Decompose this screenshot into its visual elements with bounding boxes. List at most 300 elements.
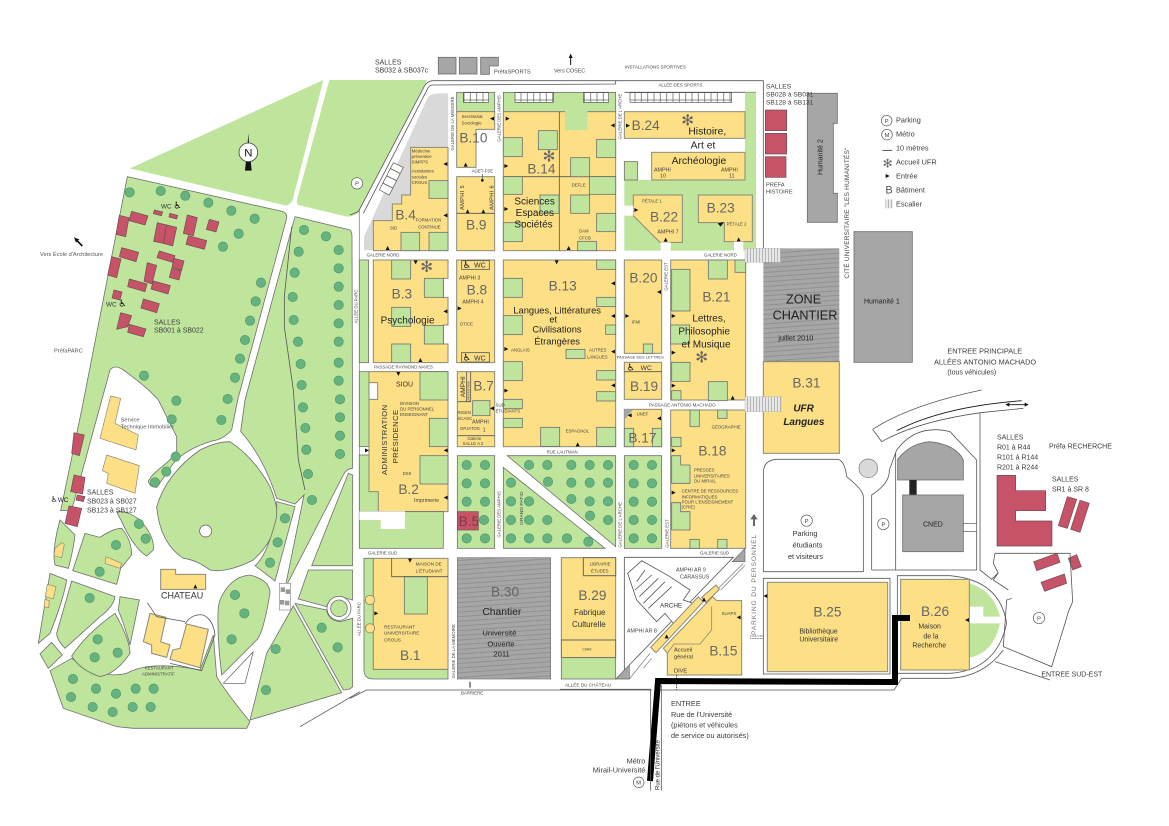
parking etudiants: P — [805, 519, 809, 525]
legend: metro — [882, 129, 915, 140]
arrow: vers COSEC: Vers COSEC — [554, 68, 585, 74]
legend: accueil UFR: ✻ — [883, 156, 893, 170]
legend: escalier: Escalier — [896, 200, 923, 209]
gate near park — [279, 583, 291, 610]
building: B.24 Histoire Art et Archeologie: AMPHI — [721, 168, 738, 174]
building: B.3 Psychologie: Psychologie — [381, 315, 435, 326]
building: B.19: WC — [641, 365, 652, 372]
label: entree principale: ENTREE PRINCIPALE — [947, 347, 1022, 356]
building: B.1 Restaurant universitaire: B.1 — [400, 648, 420, 663]
gallery labels south: GALERIE DE LA MÉMOIRE — [451, 624, 456, 678]
building: B.23 — [698, 195, 752, 251]
building: B.3 Psychologie — [373, 258, 448, 363]
amphitheatre arche: CARASSUS — [680, 574, 710, 580]
building: B.4: sociales — [412, 175, 427, 180]
prefab classrooms SB001 to SB022 — [108, 210, 219, 337]
zone chantier: juillet 2010 — [777, 334, 813, 343]
gallery labels south: GALERIE SUD — [368, 551, 397, 556]
building: B.18 — [671, 410, 746, 548]
building: B.8: AMPHI 3 — [459, 276, 480, 282]
building: B.22 — [624, 195, 682, 251]
building: chateau: CHATEAU — [161, 591, 203, 601]
building: B.24 Histoire Art et Archeologie: Archéologie — [672, 156, 726, 167]
CNED site: P — [881, 522, 885, 528]
legend: metro: M — [885, 133, 890, 139]
building: B.30 Chantier: 2011 — [493, 650, 510, 659]
label: Prefa PARC: PréfaPARC — [54, 349, 83, 355]
arrow: vers COSEC — [554, 54, 585, 74]
building: B.9: AMPHI 5 — [460, 185, 466, 210]
building: B.1 Restaurant universitaire: MAISON DE — [416, 562, 442, 567]
label: WC with wheelchair: ♿WC — [51, 495, 69, 504]
building: B.7 — [457, 372, 495, 447]
building: B.29 Fabrique Culturelle: Culturelle — [572, 620, 606, 629]
prefab histoire: PRÉFA — [766, 183, 785, 189]
grand patio upper triangle — [507, 456, 616, 547]
building: B.24 Histoire Art et Archeologie — [624, 92, 756, 251]
park: northern landscape — [38, 80, 427, 728]
building: B.31 UFR Langues: UFR — [793, 404, 815, 415]
building: B.1 Restaurant universitaire: L'ÉTUDIANT — [416, 568, 443, 574]
south east: parking, CNED, bibliotheque, recherche — [657, 390, 1112, 690]
building: B.18: B.18 — [698, 443, 726, 458]
building: B.15: SUAPS — [722, 611, 736, 616]
building: B.15: DIVE — [674, 669, 687, 675]
legend: accueil UFR: Accueil UFR — [896, 157, 937, 166]
parking etudiants: Parking — [793, 529, 818, 538]
label: entree: Rue de l'Université — [671, 710, 732, 719]
building: Humanite 2: Humanité 2 — [818, 139, 825, 175]
label: rue de l'universite vertical: Rue de l'Université — [656, 739, 662, 790]
vertical gallery labels: PASSAGE DES LETTRES — [617, 355, 664, 360]
building: B.30 Chantier: Université — [482, 628, 516, 637]
building: B.1 Restaurant universitaire — [364, 558, 448, 679]
building: B.2 Administration Presidence: Imprimerie — [414, 498, 439, 504]
building: B.4: FORMATION — [416, 218, 441, 223]
building: B.7: Galerie — [467, 436, 482, 441]
lawn: east of the park road — [241, 217, 353, 588]
building: B.9 — [457, 169, 495, 251]
building: B.14 Sciences Espaces Societes: ✻ — [543, 148, 555, 166]
north arrow: N — [244, 147, 252, 159]
building: B.9: AMPHI 6 — [489, 185, 495, 210]
entrance rue de l'Universite — [560, 685, 749, 791]
label: Vers Ecole d'Architecture: Vers École d'Architecture — [40, 251, 103, 258]
label: prefa recherche: Préfa RECHERCHE — [1049, 443, 1112, 450]
building: B.8: DTICE — [460, 322, 473, 327]
building: B.17: B.17 — [628, 430, 656, 445]
vertical gallery labels: GALERIE NORD — [704, 253, 737, 258]
building: B.4: préventive — [412, 154, 432, 159]
WC icon south: WC ♿ — [106, 298, 127, 309]
building: B.21 Lettres Philosophie Musique: Philosophie — [678, 326, 730, 337]
building: B.2 Administration Presidence: PRÉSIDENCE — [391, 410, 400, 463]
building: B.4: CROUS — [412, 180, 427, 185]
labels: allee du chateau and barriere: ALLÉE DU CHÂTEAU — [565, 682, 611, 688]
legend: accueil UFR — [883, 156, 937, 170]
top road outline — [350, 81, 763, 250]
building: B.13 Langues Litteratures: AUTRES — [589, 348, 607, 353]
lawn: north-east — [297, 80, 427, 217]
building: B.26 Maison de la Recherche: Maison — [918, 624, 941, 631]
grand patio trees — [506, 460, 613, 546]
road lines near park east — [300, 692, 360, 727]
building: B.22: PÉTALE 1 — [642, 199, 662, 204]
CNED site: CNED — [923, 522, 943, 529]
building: B.4: B.4 — [395, 207, 416, 222]
label: entree: ENTREE — [671, 699, 701, 708]
thin path across lawn — [284, 227, 305, 490]
label: salles R01: R101 à R144 — [997, 455, 1038, 462]
building: B.2 Administration Presidence — [359, 372, 448, 512]
building: B.14 Sciences Espaces Societes: CFCB — [579, 236, 591, 241]
building: B.13 Langues Litteratures: et — [549, 315, 558, 325]
parking etudiants: et visiteurs — [788, 552, 823, 561]
building: B.18: UNIVERSITAIRES — [694, 474, 730, 479]
building: B.24 Histoire Art et Archeologie: Histoire, — [688, 127, 726, 138]
label: allee des sports: ALLÉE DES SPORTS — [658, 82, 702, 88]
label: cite universitaire: CITÉ UNIVERSITAIRE "LES HUMANITÉS" — [842, 147, 851, 279]
label: entree: de service ou autorisés) — [671, 731, 749, 740]
building: B.24 Histoire Art et Archeologie: AMPHI — [654, 168, 671, 174]
building: B.8: WC — [474, 356, 486, 363]
campus north blocks — [350, 54, 763, 447]
building: B.30 Chantier: Ouverte — [487, 639, 515, 648]
building: B.18: (CRIE) — [682, 505, 695, 510]
label: salles R01: R01 à R44 — [997, 445, 1031, 452]
building: B.18: GÉOGRAPHIE — [712, 424, 741, 429]
building: B.30 Chantier: Chantier — [482, 607, 522, 618]
building: B.4: SIMPPS — [412, 160, 428, 165]
building: B.24 Histoire Art et Archeologie: B.24 — [632, 118, 660, 133]
building: B.24 Histoire Art et Archeologie: 10 — [660, 174, 666, 180]
arrow: towards Ecole d'Architecture — [76, 239, 82, 246]
building: B.1 Restaurant universitaire: CROUS — [384, 638, 401, 643]
building: B.7: AMPHI — [472, 420, 489, 426]
grand patio lower triangle — [503, 467, 605, 548]
building: B.24 Histoire Art et Archeologie: 11 — [729, 174, 735, 180]
prefab classrooms SB023 to SB127 — [65, 433, 85, 527]
building: B.18: PRESSES — [694, 468, 715, 473]
building: B.21 Lettres Philosophie Musique: B.21 — [702, 290, 730, 305]
label: SUD etudiants: ÉTUDIANTS — [496, 409, 520, 414]
building: B.26 Maison de la Recherche: de la — [923, 634, 939, 641]
label: Prefa Sports: PréfaSPORTS — [494, 70, 531, 76]
label: rue Lautman: RUE LAUTMAN — [547, 450, 578, 455]
label: entree principale: (tous véhicules) — [947, 369, 996, 376]
building: B.10: B.10 — [459, 131, 488, 146]
gallery labels south: GALERIE DES AMPHIS — [497, 491, 502, 538]
building: Humanite 1 — [854, 232, 912, 362]
label: SALLES SB001: SB001 à SB022 — [154, 328, 204, 335]
label: salles R01: SALLES — [997, 434, 1023, 441]
building: B.21 Lettres Philosophie Musique: ✻ — [695, 349, 708, 367]
building: B.2 Administration Presidence: ADMINISTRATION — [380, 404, 389, 475]
label: salles SB028: SB128 à SB131 — [766, 100, 814, 107]
zone chantier: ZONE — [786, 292, 821, 306]
prefab grey buildings — [438, 57, 498, 74]
building: B.22: B.22 — [650, 210, 678, 225]
legend: metro: Métro — [896, 130, 915, 139]
legend: batiment: Bâtiment — [896, 186, 925, 195]
building: Humanite 1: Humanité 1 — [864, 298, 900, 305]
building: B.4 — [373, 147, 448, 251]
building: B.29 Fabrique Culturelle: B.29 — [578, 588, 606, 603]
building: B.25 Bibliotheque — [763, 578, 890, 674]
east side: Humanites, chantier, legend — [745, 84, 1036, 453]
label: metro: Métro — [627, 756, 645, 765]
building: B.31 UFR Langues: B.31 — [792, 376, 820, 391]
building: B.26 Maison de la Recherche: Recherche — [912, 643, 946, 650]
label: salles SR: SR1 à SR 8 — [1052, 486, 1089, 493]
building: B.2 Administration Presidence: DU PERSONNEL — [400, 407, 435, 412]
entrance road — [873, 390, 1029, 442]
WC icon north: WC ♿ — [161, 200, 182, 211]
lawn: north wedge — [130, 80, 323, 205]
label: salles SB032: SALLES — [375, 59, 401, 66]
building: B.9: B.9 — [466, 217, 486, 232]
building: B.13 Langues Litteratures: Civilisations — [532, 325, 582, 335]
buildings of the park — [44, 396, 139, 608]
north arrow — [239, 133, 258, 171]
building: B.4: Médecine — [412, 149, 431, 154]
prefab histoire: HISTOIRE — [766, 189, 793, 195]
labels: allee du chateau and barriere: BARRIERE — [461, 691, 483, 696]
arrow head — [74, 237, 79, 243]
building: B.7: B.7 — [473, 379, 494, 394]
zone chantier: CHANTIER — [773, 308, 837, 322]
building: B.18: POUR L'ENSEIGNEMENT — [682, 500, 734, 505]
vertical gallery labels: GALERIE NORD — [367, 253, 399, 258]
vertical gallery labels: PASSAGE RAYMOND NAVES — [374, 365, 433, 370]
garden block west with B.5: B.5 — [459, 514, 480, 529]
stairs south — [745, 397, 781, 412]
building: B.29 Fabrique Culturelle — [561, 558, 616, 679]
building: B.29 Fabrique Culturelle: CIAM — [582, 648, 591, 652]
building: B.30 Chantier: B.30 — [491, 585, 519, 600]
parking etudiants: étudiants — [793, 541, 823, 550]
pond — [200, 525, 212, 537]
vertical gallery labels: ALLÉE DU PARC — [354, 289, 359, 323]
label: Service Technique Immobilier: Service — [121, 418, 140, 424]
lawn: small patches around park — [38, 473, 353, 728]
amphitheatre arche — [627, 561, 710, 635]
gallery labels south — [357, 491, 729, 678]
label: SALLES SB023: SB123 à SB127 — [87, 507, 137, 514]
building: B.15: Accueil — [674, 648, 692, 654]
prefab research buildings — [997, 475, 1089, 591]
building: B.14 Sciences Espaces Societes: Espaces — [516, 208, 554, 219]
garden block west with B.5 — [457, 456, 495, 548]
building: B.15: général — [674, 655, 693, 661]
building: B.29 Fabrique Culturelle: Fabrique — [574, 608, 606, 617]
label: salles SB028: SALLES — [766, 84, 791, 91]
gallery labels south: GALERIE SUD — [700, 551, 729, 556]
vertical gallery labels: GALERIE DE L'ARCHE — [618, 94, 623, 139]
building: B.1 Restaurant universitaire: RESTAURANT — [384, 625, 415, 630]
label: parking du personnel — [750, 514, 763, 638]
building: B.22: AMPHI 7 — [657, 229, 679, 235]
building: B.29 Fabrique Culturelle: LIBRAIRIE — [590, 561, 611, 566]
parking south-east: ENTREE SUD-EST — [1041, 671, 1103, 678]
parking south-east — [993, 553, 1103, 680]
building: B.7: SCASC — [457, 416, 472, 421]
legend — [881, 115, 937, 209]
building: B.13 Langues Litteratures — [503, 260, 616, 447]
building: B.13 Langues Litteratures: LANGUES — [587, 355, 608, 360]
building: B.18: INFORMATIQUES — [682, 494, 718, 499]
amphitheatre arche: AMPHI AR 9 — [676, 567, 706, 573]
building: B.25 Bibliotheque: B.25 — [813, 605, 842, 620]
legend: parking — [881, 115, 921, 126]
building: B.26 Maison de la Recherche: B.26 — [921, 604, 949, 619]
building: B.7: 1 — [483, 428, 486, 434]
amphitheatre arche: AMPHI AR 8 — [627, 629, 657, 635]
building: restaurant administratif: RESTAURANT — [145, 666, 174, 671]
building: B.4: SID — [390, 226, 397, 231]
building: B.7: OPJATOS — [460, 426, 480, 431]
building: B.13 Langues Litteratures: Langues, Littératures — [513, 306, 601, 316]
label: salles SB032: SB032 à SB037c — [375, 68, 429, 75]
label: installations sportives: INSTALLATIONS SPORTIVES — [625, 65, 686, 70]
gallery labels south: ALLÉE DU PARC — [357, 602, 362, 636]
building: B.18: DU MIRAIL — [694, 479, 716, 484]
building: B.29 Fabrique Culturelle: ÉTUDES — [591, 569, 609, 574]
building: B.13 Langues Litteratures: ESPAGNOL — [566, 429, 590, 434]
building: B.4: Assistantes — [412, 169, 434, 174]
building: B.23: PÉTALE 2 — [727, 222, 747, 227]
building: B.14 Sciences Espaces Societes: DAM — [579, 229, 589, 234]
main route: black pedestrian path — [650, 618, 910, 781]
building: B.19: ♿ — [627, 362, 635, 373]
legend: parking: Parking — [896, 116, 921, 125]
south road line — [657, 650, 1003, 690]
building: B.17: UNEF — [637, 411, 649, 416]
building: B.7: INGEN — [457, 410, 471, 415]
building: B.18: CENTRE DE RESSOURCES — [682, 489, 738, 494]
legend: batiment — [885, 184, 925, 196]
building: B.9: AGET-FSE — [472, 169, 493, 174]
vertical gallery labels: GALERIE DE LA MÉMOIRE — [450, 96, 455, 151]
building: B.1 Restaurant universitaire: UNIVERSITAIRE — [384, 631, 419, 636]
label: SALLES SB023: SALLES — [87, 490, 113, 497]
parking etudiants — [763, 459, 863, 572]
label: passage Antonio Machado: PASSAGE ANTONIO MACHADO — [649, 403, 716, 408]
building: B.31 UFR Langues — [763, 362, 839, 453]
building: B.8 — [457, 260, 495, 364]
amphitheatre arche: ARCHE — [660, 602, 682, 609]
label: SALLES SB001: SALLES — [154, 319, 180, 326]
building: B.17 — [624, 409, 662, 447]
label: salles SR: SALLES — [1052, 476, 1078, 483]
building: B.24 Histoire Art et Archeologie: ✻ — [681, 111, 694, 129]
label: salles SB028: SB028 à SB031 — [766, 92, 814, 99]
label: entree principale: ALLÉES ANTONIO MACHADO — [934, 358, 1036, 367]
building: B.8: WC — [474, 262, 486, 269]
gallery labels south: GALERIE DE L'ARCHE — [618, 502, 623, 548]
building: B.13 Langues Litteratures: Étrangères — [534, 336, 580, 346]
lawn: central oval — [157, 442, 277, 571]
legend: entree: Entrée — [896, 172, 918, 181]
campus south blocks — [350, 362, 746, 698]
allee du parc edge line — [358, 210, 361, 548]
building: B.13 Langues Litteratures: B.13 — [549, 279, 577, 294]
parking marker on lawn — [351, 178, 363, 189]
building: B.23: B.23 — [707, 201, 735, 216]
arche triangle frame — [616, 548, 745, 679]
parking bays — [379, 163, 403, 195]
label: salles R01: R201 à R244 — [997, 465, 1038, 472]
legend: scale: 10 mètres — [896, 144, 929, 153]
building: B.14 Sciences Espaces Societes: DEFLE — [572, 183, 586, 188]
building: restaurant administratif — [142, 603, 215, 677]
building: B.14 Sciences Espaces Societes: Sociétés — [514, 220, 553, 231]
building: B.21 Lettres Philosophie Musique — [671, 260, 746, 401]
building: B.31 UFR Langues: Langues — [783, 417, 825, 428]
building: B.8: ♿ — [463, 260, 471, 271]
zone chantier — [763, 248, 839, 362]
building: B.19: B.19 — [630, 379, 658, 394]
building: B.14 Sciences Espaces Societes: Sciences — [514, 197, 555, 208]
building: B.8: AMPHI 4 — [462, 300, 484, 306]
building: B.25 Bibliotheque: Bibliothèque — [799, 629, 838, 636]
building: B.2 Administration Presidence: DSII — [403, 471, 411, 476]
building: restaurant administratif: ADMINISTRATIF — [142, 672, 175, 677]
labels: allee du chateau and barriere — [350, 675, 677, 698]
road outlines — [560, 685, 661, 791]
building: B.20: IFMI — [632, 320, 640, 325]
building: chateau — [161, 569, 206, 601]
building: B.25 Bibliotheque: Universitaire — [799, 637, 838, 644]
building: B.3 Psychologie: B.3 — [392, 287, 412, 302]
building: B.4: CONTINUE — [418, 225, 441, 230]
label: metro: Mirail-Université — [593, 765, 645, 774]
label: SALLES SB023: SB023 à SB027 — [87, 499, 137, 506]
lawn south of administration — [359, 511, 443, 548]
roundabout — [859, 459, 878, 478]
building: B.10 — [457, 92, 495, 167]
building: B.2 Administration Presidence: SIOU — [396, 381, 413, 388]
building: B.20 — [624, 260, 662, 353]
grey car park — [364, 93, 448, 250]
building: B.2 Administration Presidence: ENSEIGNANT — [400, 412, 428, 417]
building: B.21 Lettres Philosophie Musique: et Musique — [682, 339, 731, 350]
building: B.15: B.15 — [709, 644, 738, 659]
legend: parking: P — [885, 119, 889, 125]
building: B.3 Psychologie: ✻ — [420, 258, 433, 276]
building: B.14 Sciences Espaces Societes: B.14 — [527, 161, 556, 176]
label: Grand Patio: GRAND PATIO — [519, 491, 525, 525]
building: B.10: Sociologie — [462, 121, 482, 126]
label: entree: (piétons et véhicules — [671, 720, 738, 729]
label: parking du personnel: PARKING DU PERSONNEL — [751, 534, 758, 635]
building: B.8: ♿ — [463, 353, 471, 364]
building: B.7: AMPHI — [460, 376, 467, 397]
building: B.7: UNIVERSITAIRE — [467, 381, 471, 401]
building: B.13 Langues Litteratures: ANGLAIS — [511, 348, 530, 353]
building: B.2 Administration Presidence: B.2 — [398, 482, 419, 497]
label: SUD etudiants: SUD — [496, 403, 505, 408]
parking marker on lawn: P — [355, 182, 359, 188]
parking south-east: P — [1037, 616, 1041, 622]
north arrow and park labels — [40, 133, 363, 355]
building: B.20: B.20 — [629, 271, 658, 286]
building: B.19 — [624, 362, 662, 399]
vertical gallery labels: GALERIE EST — [664, 262, 669, 291]
green strip along allee du parc — [359, 260, 369, 363]
building: B.10: Secrétariat — [462, 114, 483, 119]
building: B.2 Administration Presidence: DIVISION — [400, 401, 419, 406]
